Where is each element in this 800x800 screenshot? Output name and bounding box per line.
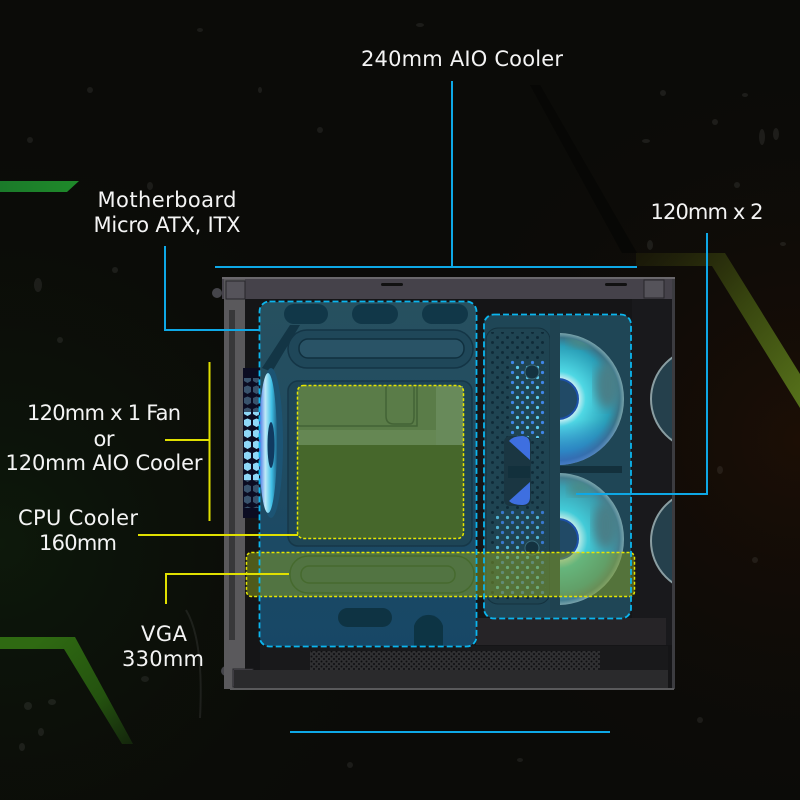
top frame — [222, 277, 675, 299]
dark accent: upper right — [530, 85, 637, 253]
dashed outline: motherboard — [260, 302, 476, 646]
case feet — [212, 288, 231, 676]
leader: side fan — [165, 362, 210, 521]
leader: VGA — [166, 574, 289, 604]
PC case — [212, 277, 675, 690]
title: 240mm AIO Cooler: 240mm AIO Cooler — [361, 47, 563, 71]
bottom rule — [290, 731, 610, 733]
label: CPU cooler: 160mm — [39, 531, 117, 555]
panel: motherboard tray — [260, 302, 476, 646]
label: CPU cooler — [18, 506, 138, 555]
label: VGA: VGA — [141, 622, 188, 646]
leader: AIO cooler — [215, 81, 637, 268]
label: motherboard: Micro ATX, ITX — [94, 213, 240, 237]
label: side fan — [6, 401, 203, 475]
green accent: top left — [0, 181, 79, 192]
left pillar — [224, 279, 245, 689]
leader: CPU cooler — [138, 534, 298, 536]
highlight: VGA — [246, 552, 634, 596]
label: side fan: 120mm AIO Cooler — [6, 451, 203, 475]
label: motherboard — [94, 188, 240, 237]
case interior — [224, 279, 674, 689]
corner screws — [226, 280, 664, 687]
green accent: bottom left — [0, 637, 133, 744]
slot opening — [504, 436, 531, 506]
leader: motherboard — [165, 246, 260, 330]
right pillar — [672, 279, 675, 689]
panel: front fan bracket — [484, 315, 631, 618]
rear honeycomb vent — [243, 368, 260, 518]
label: CPU cooler: CPU Cooler — [18, 506, 138, 530]
floor shelf — [476, 618, 666, 645]
label: VGA — [122, 622, 204, 671]
VGA area: stamped rib — [290, 556, 474, 593]
leader: 120mm x 2 — [576, 233, 707, 494]
highlight: CPU cooler — [298, 386, 464, 538]
label: side fan: or — [94, 427, 115, 451]
icon: side fan — [259, 368, 283, 518]
bottom frame with vent — [260, 646, 668, 670]
olive accent: right — [636, 253, 800, 408]
label: 120mm x 2: 120mm x 2 — [650, 200, 764, 224]
fan lower — [560, 473, 624, 605]
label: VGA: 330mm — [122, 647, 204, 671]
dashed outline: front fans — [484, 314, 631, 618]
label: motherboard: Motherboard — [98, 188, 236, 212]
rear side fans — [650, 356, 672, 584]
label: side fan: 120mm x 1 Fan — [27, 401, 181, 425]
fan upper — [560, 333, 624, 465]
